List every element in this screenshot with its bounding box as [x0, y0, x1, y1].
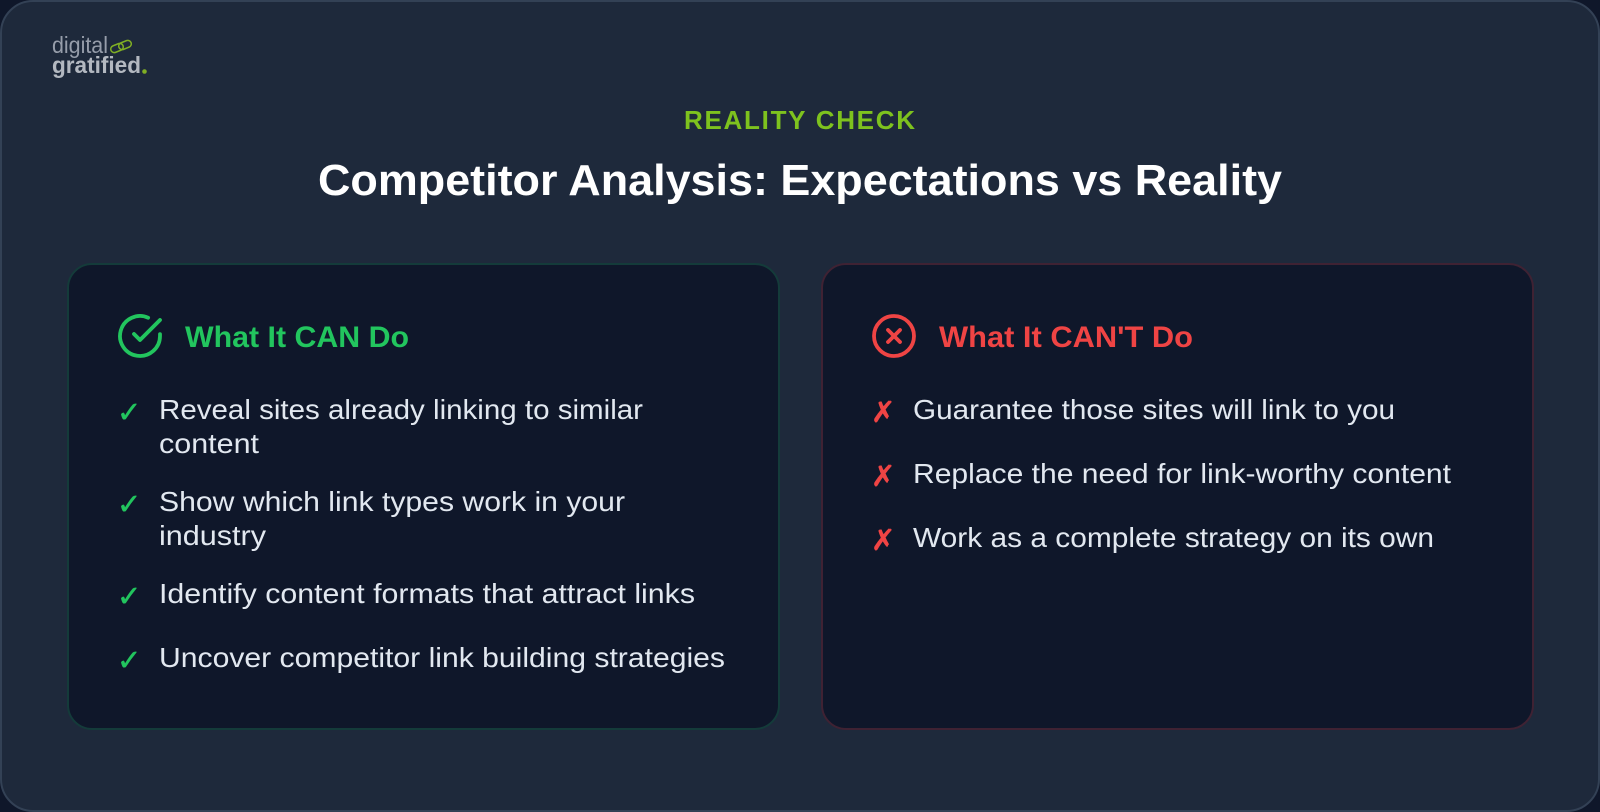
list item: reveal sites [117, 394, 643, 459]
logo: digital gratified [52, 32, 147, 78]
list item: link types: industry [159, 520, 266, 551]
title: Competitor Analysis: Expectations vs Reality [318, 156, 1283, 205]
list item: strategies: ✓ [117, 643, 141, 677]
logo: digital gratified: digital [52, 32, 108, 58]
icon: check circle [120, 316, 160, 356]
list item: reveal sites: ✓ [117, 395, 141, 429]
list item: link types: ✓ [117, 487, 141, 521]
list item: content formats: ✓ [117, 579, 141, 613]
list item: replace: Replace the need for link-worthy content [913, 458, 1451, 489]
list item: strategies: Uncover competitor link building strategies [159, 642, 725, 673]
list item: strategy: ✗ [871, 523, 895, 557]
list item: guarantee: Guarantee those sites will link to you [913, 394, 1395, 425]
icon: x circle [874, 316, 914, 356]
list item: strategy: Work as a complete strategy on its own [913, 522, 1434, 553]
list item: guarantee: ✗ [871, 395, 895, 429]
list item: content formats: Identify content formats that attract links [159, 578, 695, 609]
list item: link types: Show which link types work in your [159, 486, 625, 517]
eyebrow: reality check: REALITY CHECK [684, 105, 915, 135]
panel: what it can do [68, 264, 779, 729]
list item: replace: ✗ [871, 459, 895, 493]
logo: digital gratified: gratified [52, 52, 141, 78]
icon: chain link [110, 39, 132, 54]
panel: what it can't do [822, 264, 1533, 729]
list item: reveal sites: Reveal sites already linking to similar [159, 394, 643, 425]
heading: what it can't do: What It CAN'T Do [939, 321, 1193, 354]
heading: what it can do: What It CAN Do [185, 321, 409, 354]
list item: link types [117, 486, 625, 551]
list item: reveal sites: content [159, 428, 259, 459]
